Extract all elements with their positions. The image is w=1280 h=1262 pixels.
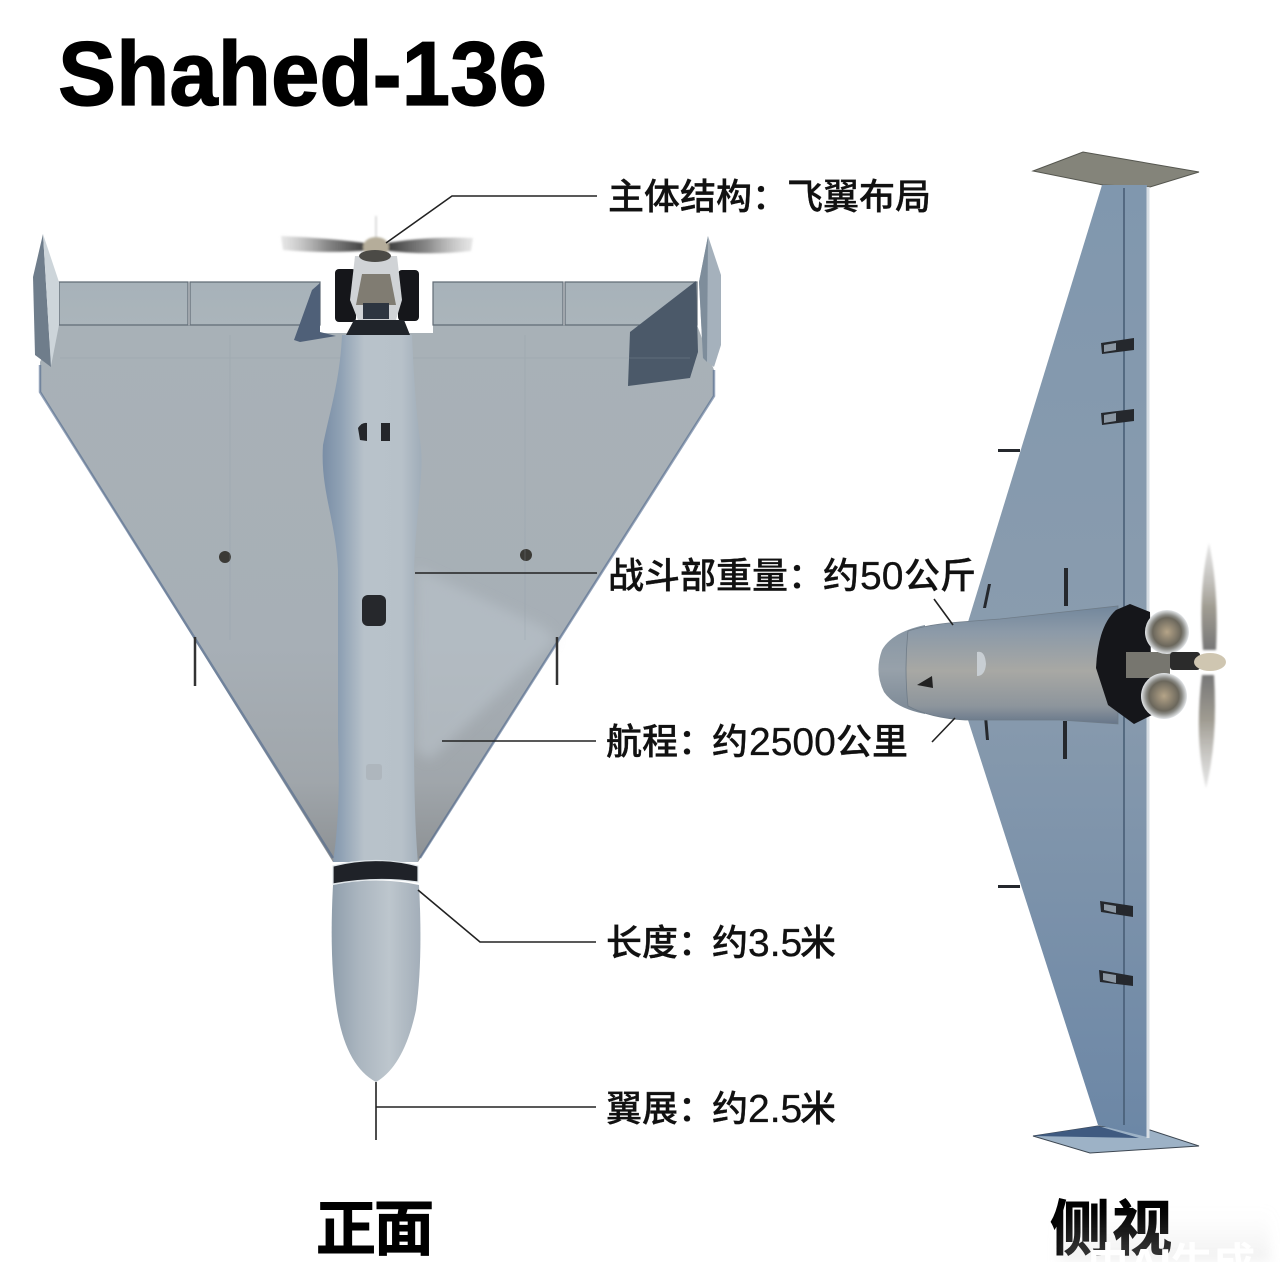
label: length: 3.5 <box>748 922 802 965</box>
label: range: 航程： <box>606 721 714 762</box>
label: length: 约 <box>712 922 748 963</box>
watermark <box>1060 1210 1270 1262</box>
title: Shahed-136 <box>58 24 547 125</box>
engine <box>335 250 419 335</box>
top winglet <box>1033 152 1199 187</box>
wing <box>968 185 1147 1137</box>
fuselage <box>323 335 421 862</box>
label: range: 2500 <box>749 721 836 764</box>
side propeller <box>1199 543 1217 788</box>
wing highlight <box>415 568 555 760</box>
label: range: 公里 <box>836 721 908 762</box>
callout lines <box>376 196 955 1140</box>
wing slots <box>983 338 1134 986</box>
nose <box>332 880 420 1082</box>
front view drone <box>33 216 721 1082</box>
label: warhead: 公 <box>904 555 940 596</box>
propeller <box>281 216 473 257</box>
label: range: 约 <box>712 721 748 762</box>
label: warhead: 约 <box>823 555 859 596</box>
label: wingspan: 米 <box>800 1088 836 1129</box>
band <box>333 860 418 884</box>
side view drone <box>878 152 1226 1153</box>
label: wingspan: 翼展： <box>606 1088 714 1129</box>
trailing flaps <box>59 282 697 325</box>
shadows <box>628 281 698 386</box>
label: length: 米 <box>800 922 836 963</box>
label: wingspan: 约 <box>712 1088 748 1129</box>
caption: front: 正面 <box>316 1196 434 1262</box>
label: wingspan: 2.5 <box>748 1088 802 1131</box>
side nose <box>878 625 925 714</box>
bottom winglet <box>1033 1126 1199 1153</box>
rear engine <box>1096 604 1226 724</box>
label: warhead: 斤 <box>940 555 976 596</box>
label: length: 长度： <box>606 922 714 963</box>
leading edge <box>40 365 714 858</box>
caption: side: 侧视 <box>1050 1196 1172 1262</box>
hatches <box>358 423 390 780</box>
wing marks <box>60 335 690 686</box>
side body <box>906 606 1118 724</box>
label: warhead: 战斗部重量： <box>608 555 824 596</box>
label: structure: 飞翼布局 <box>787 176 931 217</box>
label: structure: 主体结构： <box>608 176 788 217</box>
label: warhead: 50 <box>860 555 903 598</box>
winglets <box>33 234 721 367</box>
wing <box>40 325 714 862</box>
